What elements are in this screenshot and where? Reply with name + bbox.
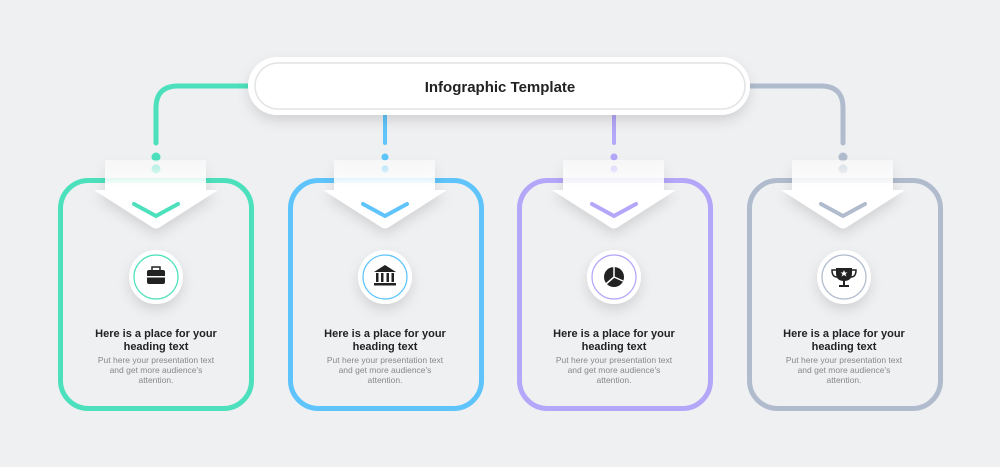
text 2: Here is a place for your [324, 328, 447, 340]
icon: trophy [817, 250, 871, 304]
panel: 4 gray [750, 160, 940, 408]
text 3: Here is a place for your [553, 328, 676, 340]
arrow 2 [323, 160, 447, 228]
text 4: heading text [812, 341, 877, 353]
title pill [248, 57, 750, 115]
connector: green [154, 86, 250, 171]
text 2: and get more audience's [339, 365, 431, 375]
panel: 1 green [60, 160, 252, 408]
icon: bank [358, 250, 412, 304]
connector: gray [750, 86, 845, 171]
text 1: attention. [139, 375, 173, 385]
text 4: and get more audience's [798, 365, 890, 375]
text 3: heading text [582, 341, 647, 353]
text 2 [324, 328, 447, 385]
text 3: Put here your presentation text [556, 355, 673, 365]
text 2: heading text [353, 341, 418, 353]
text 1: heading text [124, 341, 189, 353]
text 2: Put here your presentation text [327, 355, 444, 365]
text 4: Here is a place for your [783, 328, 906, 340]
arrow 1 [94, 160, 218, 228]
text 3: attention. [597, 375, 631, 385]
text 1: Put here your presentation text [98, 355, 215, 365]
arrow 4 [781, 160, 905, 228]
icon: briefcase [129, 250, 183, 304]
text 3 [553, 328, 676, 385]
arrow 3 [552, 160, 676, 228]
panel: 3 purple [520, 160, 710, 408]
text 1: Here is a place for your [95, 328, 218, 340]
text 4 [783, 328, 906, 385]
text 1 [95, 328, 218, 385]
text 1: and get more audience's [110, 365, 202, 375]
connector: purple [612, 112, 616, 170]
text 3: and get more audience's [568, 365, 660, 375]
icon: pie chart [587, 250, 641, 304]
panel: 2 blue [290, 160, 482, 408]
text 4: Put here your presentation text [786, 355, 903, 365]
connector: blue [384, 112, 386, 170]
title pill: Infographic Template [425, 79, 575, 96]
text 4: attention. [827, 375, 861, 385]
text 2: attention. [368, 375, 402, 385]
